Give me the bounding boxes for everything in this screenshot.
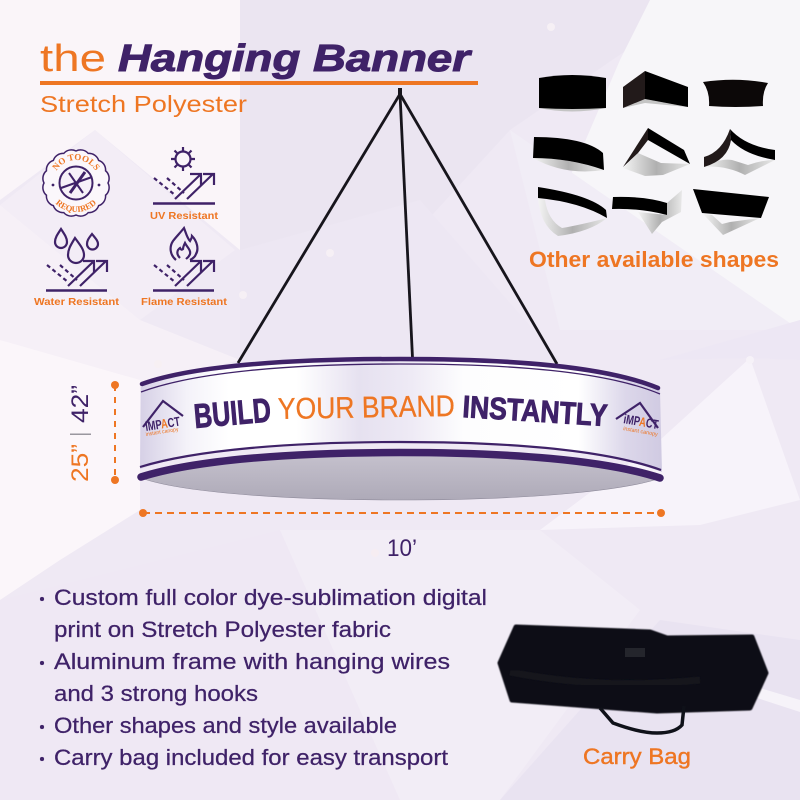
shape: flared curve	[703, 80, 768, 107]
label: other shapes: Other available shapes	[529, 247, 779, 272]
icon: no tools required badge: REQUIRED	[56, 199, 96, 213]
label: flame resistant: Flame Resistant	[141, 296, 228, 308]
shape: concave diamond	[704, 129, 775, 175]
bottom purple stripes	[140, 442, 661, 478]
banner text: INSTANTLY: INSTANTLY	[462, 389, 609, 433]
label: water resistant: Water Resistant	[34, 296, 120, 308]
top purple stripes	[141, 359, 660, 394]
label: carry bag: Carry Bag	[583, 744, 691, 769]
shape: folded ribbon	[612, 190, 682, 234]
hanging banner	[140, 358, 662, 500]
shape: teardrop	[533, 137, 604, 172]
feature list: Carry bag included for easy transport	[54, 745, 448, 770]
shape: angled wall	[623, 71, 688, 108]
banner underside	[141, 452, 661, 500]
feature list: Other shapes and style available	[54, 713, 397, 738]
feature list: and 3 strong hooks	[54, 681, 258, 706]
icon: water resistant	[46, 229, 107, 290]
banner fabric	[140, 358, 662, 472]
shape: shield	[538, 187, 607, 236]
carry bag	[500, 627, 766, 733]
shape: diamond	[623, 128, 690, 176]
logo: left	[143, 401, 183, 438]
icon: no tools required badge	[42, 149, 110, 217]
icon: UV resistant	[153, 147, 215, 204]
logo: left: iMPACT	[144, 414, 181, 434]
title: the	[40, 38, 106, 80]
feature list: Aluminum frame with hanging wires	[54, 649, 450, 674]
feature list: print on Stretch Polyester fabric	[54, 617, 391, 642]
logo: left: instant canopy	[145, 427, 179, 438]
feature list: Custom full color dye-sublimation digital	[54, 585, 487, 610]
logo: right: iMPACT	[622, 411, 660, 432]
logo: right	[616, 403, 660, 438]
banner text: YOUR BRAND: YOUR BRAND	[278, 390, 455, 426]
height dimension: 25”	[67, 444, 94, 482]
subtitle: Stretch Polyester	[40, 91, 247, 117]
width dimension: 10’	[387, 535, 417, 562]
title	[40, 38, 478, 85]
icon: no tools required badge: NO TOOLS	[52, 154, 100, 171]
shape: curved rectangle	[539, 75, 606, 112]
label: UV resistant: UV Resistant	[150, 210, 219, 222]
title: Hanging Banner	[118, 38, 473, 80]
feature list	[40, 585, 487, 770]
banner text: BUILD: BUILD	[192, 391, 272, 436]
hanging wires	[238, 88, 557, 364]
icon: flame resistant	[153, 228, 214, 290]
logo: right: instant canopy	[623, 426, 658, 438]
height dimension: 42”	[67, 385, 94, 423]
shape: wedge	[693, 189, 769, 235]
width dimension	[139, 509, 665, 562]
other shapes gallery	[533, 71, 775, 236]
height dimension	[67, 381, 119, 484]
